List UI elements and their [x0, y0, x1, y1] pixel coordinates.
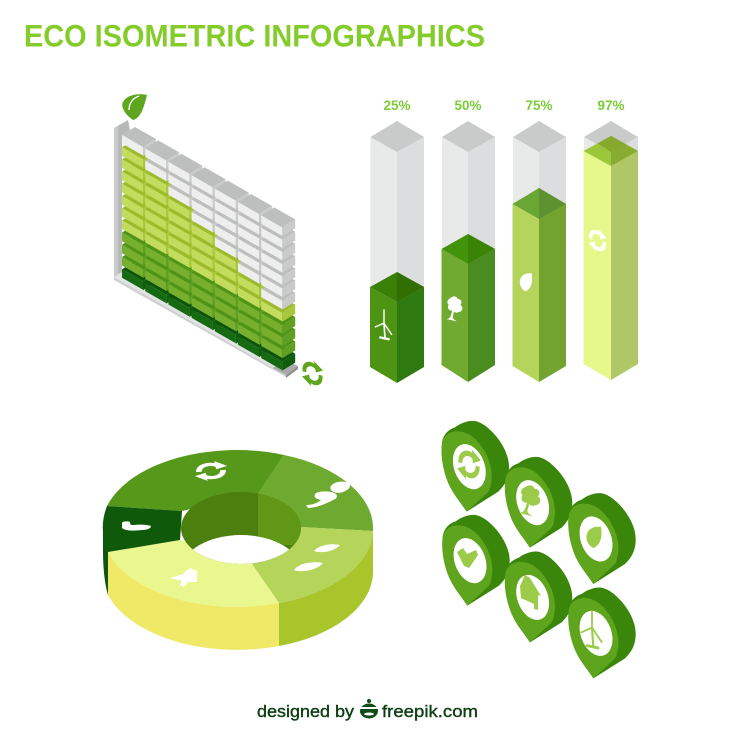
block column 3 [168, 154, 202, 317]
block column 6 [238, 194, 272, 357]
pin: tree [505, 457, 572, 548]
bar 97%: 97% [597, 98, 625, 113]
icon: recycle beside chart [302, 355, 323, 392]
bar 50%: 50% [454, 98, 482, 113]
block column 4 [192, 167, 226, 330]
panel: isometric percentage bars [370, 98, 638, 383]
pin: wind turbine [568, 588, 636, 678]
icon: leaf above chart [122, 94, 147, 120]
chart back wall and floor [114, 120, 298, 378]
bar 50% [442, 98, 495, 382]
icon: wind turbine [375, 310, 392, 339]
icon: trees on donut [306, 482, 350, 508]
footer: designed by freepik.com: designed by [257, 702, 355, 721]
footer: designed by freepik.com: freepik.com [382, 702, 478, 721]
pin: house [505, 552, 572, 642]
panel: stacked isometric block chart [114, 94, 323, 392]
bar 75% [512, 98, 566, 382]
bar 25% [370, 98, 424, 383]
icon: leaf [520, 273, 532, 291]
icon: house on donut [170, 568, 197, 587]
panel: isometric map pins [441, 421, 636, 678]
bar 25%: 25% [383, 98, 411, 113]
segment: dark [103, 506, 182, 552]
footer: designed by freepik.com [257, 699, 478, 721]
block column 1 [122, 127, 156, 290]
segment: house [108, 540, 279, 607]
icon: shoe on donut [122, 521, 151, 531]
segment: leaves [252, 527, 373, 603]
title: ECO ISOMETRIC INFOGRAPHICS [24, 18, 485, 54]
panel: isometric donut chart [103, 450, 373, 650]
bar 75%: 75% [525, 98, 553, 113]
pin: leaf [568, 493, 636, 584]
icon: leaves on donut [294, 544, 340, 571]
pin: recycle [441, 421, 509, 512]
icon: recycle on donut [194, 460, 228, 482]
icon: tree [444, 295, 464, 322]
block column 7 [261, 207, 295, 371]
icon: freepik logo [359, 699, 379, 718]
segment: trees [258, 455, 373, 531]
icon: recycle [589, 224, 606, 257]
pin: check [442, 515, 510, 606]
donut outer sides [103, 530, 373, 650]
bar 97% [584, 98, 638, 380]
segment: recycling [107, 450, 284, 511]
donut inner wall and hole [181, 492, 301, 564]
block column 5 [215, 181, 249, 344]
block column 2 [145, 140, 179, 304]
